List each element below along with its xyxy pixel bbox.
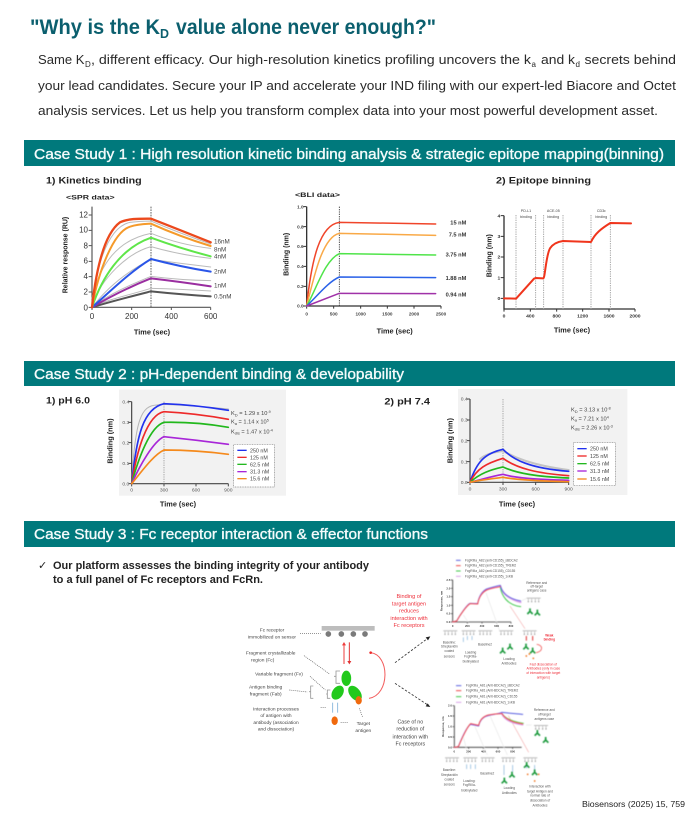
panel: SPR kinetics chart: 400 xyxy=(165,312,179,321)
panel: SPR kinetics chart: 0.5nM xyxy=(214,293,232,300)
panel: epitope binning chart: 1 xyxy=(498,275,501,281)
panel: SPR kinetics chart: 6 xyxy=(84,257,89,266)
panel: pH 7.4 chart: 2) pH 7.4 xyxy=(384,397,430,407)
panel: pH 7.4 chart: 0 xyxy=(469,486,472,492)
chart: FcgRIIIa sensorgram, reduced interaction: 2.5 xyxy=(446,578,451,582)
panel: BLI kinetics chart: 2000 xyxy=(409,311,420,316)
diagram: Fc receptor antibody schematic: interaction with xyxy=(393,734,428,740)
panel: BLI kinetics chart: 0.94 nM xyxy=(446,293,467,299)
chart: FcgRIIIa sensorgram, reduced interaction: sensors xyxy=(444,654,455,658)
callout: binding of target antigen: target antigen xyxy=(392,602,426,608)
diagram: Fc receptor antibody schematic: Variable fragment (Fv) xyxy=(255,671,303,677)
chart: FcgRIIIa sensorgram, no reduction: 2.0 xyxy=(448,704,452,708)
chart: FcgRIIIa sensorgram, no reduction: antigens case xyxy=(534,717,554,721)
diagram: Fc receptor antibody schematic: of antigen with xyxy=(260,713,292,719)
diagram: Fc receptor antibody schematic: Fc receptor xyxy=(260,628,285,634)
panel: pH 6.0 chart: 600 xyxy=(192,488,200,494)
panel: pH 7.4 chart: 250 nM xyxy=(590,447,608,453)
panel: pH 6.0 chart: 15.6 nM xyxy=(250,477,269,483)
intro text block: your lead candidates. Secure your IP and accelerate your IND filing with our expert-led Biacore and Octet xyxy=(38,78,676,93)
chart: FcgRIIIa sensorgram, no reduction: Baseline2 xyxy=(480,772,495,776)
diagram: Fc receptor antibody schematic: immobilized on sensor xyxy=(248,635,296,641)
panel: pH 6.0 chart xyxy=(46,390,286,509)
panel: pH 7.4 chart: a xyxy=(575,418,578,423)
panel: pH 7.4 chart: 0.2 xyxy=(461,438,468,444)
chart: FcgRIIIa sensorgram, reduced interaction: Weak xyxy=(545,633,554,637)
panel: pH 6.0 chart: = 1.14 x 10 xyxy=(237,420,267,426)
panel: pH 6.0 chart: 250 nM xyxy=(250,448,268,454)
panel: epitope binning chart: 800 xyxy=(553,314,561,320)
panel: pH 6.0 chart: 1) pH 6.0 xyxy=(46,396,90,406)
chart: FcgRIIIa sensorgram, no reduction: FcgRIIIa_A81 (Anti-BDCA2)_1xKB xyxy=(466,700,515,704)
panel: epitope binning chart: 2 xyxy=(498,255,501,261)
intro text block: analysis services. Let us help you transform complex data into your most powerful development asset. xyxy=(38,103,658,118)
panel: pH 6.0 chart: 5 xyxy=(267,419,269,423)
panel: pH 6.0 chart: 125 nM xyxy=(250,455,268,461)
panel: pH 6.0 chart: 0.4 xyxy=(122,399,130,405)
panel: SPR kinetics chart: Time (sec) xyxy=(134,328,171,337)
section header: case study 1 xyxy=(24,140,675,166)
intro text block: , different efficacy. Our high-resolution kinetics profiling uncovers the k xyxy=(91,52,531,67)
panel: pH 6.0 chart: dis xyxy=(235,431,240,436)
panel: BLI kinetics chart: 3.75 nM xyxy=(446,253,467,259)
callout: platform statement: to a full panel of Fc receptors and FcRn. xyxy=(53,574,263,586)
panel: epitope binning chart: PD-L1 xyxy=(521,209,531,213)
panel: pH 7.4 chart: Time (sec) xyxy=(499,500,536,509)
diagram: Fc receptor antibody schematic: antigen xyxy=(355,728,372,734)
chart: FcgRIIIa sensorgram, no reduction: Interaction with xyxy=(529,784,551,788)
callout: binding of target antigen xyxy=(390,594,428,629)
chart: FcgRIIIa sensorgram, reduced interaction: FcgRIIIa_A82 (anti-CD155)_CD155 xyxy=(465,569,516,573)
panel: SPR kinetics chart: 4nM xyxy=(214,253,226,260)
panel: BLI kinetics chart: 1.0 xyxy=(297,204,304,209)
panel: SPR kinetics chart xyxy=(46,175,232,337)
diagram: Fc receptor antibody schematic: antibody (association xyxy=(253,720,299,726)
panel: BLI kinetics chart: 1000 xyxy=(355,311,366,316)
section header: case study 3: Case Study 3 : Fc receptor interaction & effector functions xyxy=(34,526,428,543)
panel: SPR kinetics chart: 1) Kinetics binding xyxy=(46,175,142,185)
chart: FcgRIIIa sensorgram, reduced interaction: Loading xyxy=(503,657,515,661)
chart: FcgRIIIa sensorgram, no reduction: FcgRIIIa_A81 (Anti-BDCA2)_sBDCA2 xyxy=(466,684,520,688)
panel: SPR kinetics chart: 0 xyxy=(84,303,89,312)
panel: pH 6.0 chart: 0.0 xyxy=(122,481,130,487)
panel: pH 7.4 chart: K xyxy=(571,425,575,431)
panel: BLI kinetics chart: Binding (nm) xyxy=(283,233,290,276)
chart: FcgRIIIa sensorgram, reduced interaction xyxy=(439,558,560,679)
panel: pH 6.0 chart: 300 xyxy=(160,488,168,494)
panel: pH 7.4 chart: 0.1 xyxy=(461,459,468,465)
chart: FcgRIIIa sensorgram, reduced interaction: 0.5 xyxy=(446,612,451,616)
panel: pH 6.0 chart: = 1.29 x 10 xyxy=(238,411,267,417)
title xyxy=(30,16,436,41)
diagram: Fc receptor antibody schematic: Fc receptors xyxy=(396,742,425,748)
panel: BLI kinetics chart: 0.6 xyxy=(297,244,304,249)
chart: FcgRIIIa sensorgram, reduced interaction: Streptavidin xyxy=(441,645,458,649)
chart: FcgRIIIa sensorgram, no reduction: FcgRIIIa- xyxy=(463,783,476,787)
intro text block xyxy=(38,52,676,118)
panel: pH 6.0 chart: K xyxy=(231,420,235,426)
panel: pH 6.0 chart: = 1.47 x 10 xyxy=(240,429,270,435)
panel: pH 6.0 chart: -4 xyxy=(270,428,273,432)
panel: pH 7.4 chart: 600 xyxy=(532,486,540,492)
panel: pH 6.0 chart: -9 xyxy=(267,410,271,414)
chart: FcgRIIIa sensorgram, reduced interaction: 200 xyxy=(465,624,470,628)
panel: SPR kinetics chart: 600 xyxy=(204,312,218,321)
chart: FcgRIIIa sensorgram, reduced interaction: 0 xyxy=(452,624,454,628)
chart: FcgRIIIa sensorgram, no reduction: dissociation of xyxy=(530,798,550,802)
title: value alone never enough?" xyxy=(176,16,436,39)
panel: epitope binning chart: Time (sec) xyxy=(554,326,591,335)
panel: pH 7.4 chart: -8 xyxy=(607,407,611,411)
panel: epitope binning chart xyxy=(487,176,641,335)
panel: SPR kinetics chart: 16nM xyxy=(214,239,230,246)
panel: pH 6.0 chart: K xyxy=(231,429,235,435)
chart: FcgRIIIa sensorgram, reduced interaction: FcgRIIIa_A82 (anti-CD155)_TREM2 xyxy=(465,564,516,568)
chart: FcgRIIIa sensorgram, reduced interaction: binding xyxy=(544,638,555,642)
chart: FcgRIIIa sensorgram, reduced interaction: FcgRIIIa_A82 (anti-CD155)_sBDCA2 xyxy=(465,558,518,562)
panel: epitope binning chart: 0 xyxy=(498,296,501,302)
callout: binding of target antigen: Binding of xyxy=(397,594,422,600)
panel: pH 7.4 chart: = 2.26 x 10 xyxy=(580,425,610,431)
diagram: Fc receptor antibody schematic: Interaction processes xyxy=(253,706,300,712)
chart: FcgRIIIa sensorgram, reduced interaction: biotinylated xyxy=(463,660,479,664)
chart: FcgRIIIa sensorgram, reduced interaction: 2.0 xyxy=(446,586,451,590)
chart: FcgRIIIa sensorgram, reduced interaction: FcgRIIIa- xyxy=(464,655,477,659)
intro text block: Same K xyxy=(38,52,85,67)
panel: epitope binning chart: 3 xyxy=(498,234,501,240)
chart: FcgRIIIa sensorgram, reduced interaction: Loading xyxy=(465,650,477,654)
section header: case study 1: Case Study 1 : High resolution kinetic binding analysis & strategic epitope mapping(binning) xyxy=(34,146,664,163)
panel: SPR kinetics chart: 0 xyxy=(90,312,95,321)
callout: binding of target antigen: Fc receptors xyxy=(393,623,425,629)
title: "Why is the K xyxy=(30,16,160,39)
panel: epitope binning chart: 2) Epitope binning xyxy=(496,176,591,186)
panel: pH 6.0 chart: D xyxy=(235,412,238,417)
panel: pH 7.4 chart: 900 xyxy=(565,486,573,492)
chart: FcgRIIIa sensorgram, reduced interaction: 1.0 xyxy=(446,603,451,607)
chart: FcgRIIIa sensorgram, reduced interaction: antigens) xyxy=(537,675,550,679)
callout: binding of target antigen: reduces xyxy=(399,608,419,614)
panel: pH 6.0 chart: 0.3 xyxy=(122,420,130,426)
panel: pH 7.4 chart: -3 xyxy=(610,424,613,428)
panel: pH 7.4 chart: 125 nM xyxy=(590,454,608,460)
callout: platform statement: ✓ xyxy=(38,560,47,572)
panel: BLI kinetics chart: 15 nM xyxy=(450,221,467,227)
chart: FcgRIIIa sensorgram, no reduction: 0 xyxy=(454,749,456,753)
panel: pH 6.0 chart: Time (sec) xyxy=(160,500,197,509)
chart: FcgRIIIa sensorgram, reduced interaction: Fast dissociation of xyxy=(530,662,557,666)
chart: FcgRIIIa sensorgram, no reduction: FcgRIIIa_A81 (Anti-BDCA2)_CD155 xyxy=(466,695,518,699)
chart: FcgRIIIa sensorgram, reduced interaction: Antibodies (only in case xyxy=(526,666,560,670)
panel: epitope binning chart: 0 xyxy=(503,314,506,320)
chart: FcgRIIIa sensorgram, reduced interaction: Baseline: xyxy=(443,640,456,644)
panel: pH 6.0 chart: 900 xyxy=(224,488,233,494)
chart: FcgRIIIa sensorgram, no reduction: Loading xyxy=(504,786,515,790)
panel: pH 7.4 chart: K xyxy=(571,416,575,422)
title: D xyxy=(160,26,169,41)
panel: epitope binning chart: 1200 xyxy=(577,314,588,320)
panel: epitope binning chart: CD3ε xyxy=(597,209,606,213)
panel: SPR kinetics chart: 4 xyxy=(84,272,89,281)
chart: FcgRIIIa sensorgram, no reduction: 600 xyxy=(496,749,501,753)
chart: FcgRIIIa sensorgram, reduced interaction: FcgRIIIa_A82 (anti-CD155)_1xKB xyxy=(465,574,513,578)
chart: FcgRIIIa sensorgram, no reduction: Loading: xyxy=(463,779,476,783)
panel: BLI kinetics chart: 0 xyxy=(305,311,308,316)
chart: FcgRIIIa sensorgram, reduced interaction: Response, nm xyxy=(439,590,443,611)
panel: SPR kinetics chart: 2 xyxy=(84,288,89,297)
panel: epitope binning chart: binding xyxy=(520,215,532,219)
panel: epitope binning chart: binding xyxy=(547,215,559,219)
panel: SPR kinetics chart: 2nM xyxy=(214,268,226,275)
chart: FcgRIIIa sensorgram, no reduction: normal rate of xyxy=(530,794,550,798)
chart: FcgRIIIa sensorgram, no reduction: off-target xyxy=(538,712,551,716)
diagram: Fc receptor antibody schematic: Target xyxy=(357,721,371,727)
panel: pH 7.4 chart: = 3.13 x 10 xyxy=(578,408,607,414)
panel: pH 6.0 chart: 0 xyxy=(130,488,133,494)
chart: FcgRIIIa sensorgram, reduced interaction: antigens case xyxy=(527,589,547,593)
chart: FcgRIIIa sensorgram, no reduction: sensors xyxy=(444,782,455,786)
panel: epitope binning chart: 400 xyxy=(526,314,535,320)
panel: pH 7.4 chart xyxy=(384,389,627,509)
panel: pH 7.4 chart: 62.5 nM xyxy=(590,462,609,468)
panel: BLI kinetics chart: 7.5 nM xyxy=(449,233,467,239)
panel: BLI kinetics chart: 2500 xyxy=(436,311,447,316)
chart: FcgRIIIa sensorgram, no reduction: Reference and xyxy=(534,708,555,712)
panel: BLI kinetics chart: 500 xyxy=(330,311,338,316)
panel: pH 7.4 chart: Binding (nm) xyxy=(445,418,454,463)
chart: FcgRIIIa sensorgram, no reduction: 0.0 xyxy=(448,745,452,749)
intro text block: and k xyxy=(541,52,575,67)
chart: FcgRIIIa sensorgram, no reduction: 1.5 xyxy=(448,714,452,718)
panel: SPR kinetics chart: <SPR data> xyxy=(66,194,115,201)
diagram: Fc receptor antibody schematic xyxy=(246,626,430,748)
chart: FcgRIIIa sensorgram, no reduction: 200 xyxy=(466,749,471,753)
panel: BLI kinetics chart: <BLI data> xyxy=(295,192,340,199)
panel: pH 6.0 chart: 62.5 nM xyxy=(250,462,269,468)
panel: epitope binning chart: 2000 xyxy=(629,314,641,320)
panel: SPR kinetics chart: 1nM xyxy=(214,282,226,289)
panel: pH 6.0 chart: K xyxy=(231,411,235,417)
panel: epitope binning chart: Binding (nm) xyxy=(487,234,494,277)
chart: FcgRIIIa sensorgram, reduced interaction: of interaction with target xyxy=(526,671,560,675)
diagram: Fc receptor antibody schematic: region (Fc) xyxy=(251,658,275,664)
panel: SPR kinetics chart: 8 xyxy=(84,241,89,250)
callout: platform statement xyxy=(38,560,370,586)
chart: FcgRIIIa sensorgram, no reduction: Response, nm xyxy=(441,716,445,737)
panel: pH 7.4 chart: dis xyxy=(575,427,580,432)
chart: FcgRIIIa sensorgram, reduced interaction: Antibodies xyxy=(502,662,517,666)
panel: pH 7.4 chart: 31.3 nM xyxy=(590,469,609,475)
panel: pH 7.4 chart: 0.4 xyxy=(461,397,468,403)
chart: FcgRIIIa sensorgram, no reduction: Antibodies xyxy=(533,803,548,807)
diagram: Fc receptor antibody schematic: Antigen binding xyxy=(249,685,283,691)
panel: pH 7.4 chart: 4 xyxy=(607,415,609,419)
chart: FcgRIIIa sensorgram, reduced interaction: 400 xyxy=(480,624,485,628)
panel: pH 6.0 chart: Binding (nm) xyxy=(105,418,114,464)
chart: FcgRIIIa sensorgram, no reduction: Antibodies xyxy=(502,791,517,795)
diagram: Fc receptor antibody schematic: and dissociation) xyxy=(258,727,295,733)
chart: FcgRIIIa sensorgram, no reduction: 1.0 xyxy=(448,725,452,729)
citation: Biosensors (2025) 15, 759 xyxy=(582,799,685,809)
chart: FcgRIIIa sensorgram, no reduction: Baseline: xyxy=(443,768,456,772)
section header: case study 3 xyxy=(24,521,675,547)
panel: SPR kinetics chart: 10 xyxy=(79,226,89,235)
chart: FcgRIIIa sensorgram, no reduction xyxy=(441,684,555,807)
chart: FcgRIIIa sensorgram, no reduction: FcgRIIIa_A81 (Anti-BDCA2)_TREM2 xyxy=(466,689,518,693)
panel: epitope binning chart: 1600 xyxy=(603,314,615,320)
panel: SPR kinetics chart: 12 xyxy=(79,211,89,220)
panel: pH 7.4 chart: 0.3 xyxy=(461,418,468,424)
chart: FcgRIIIa sensorgram, reduced interaction: Baseline2 xyxy=(478,642,492,646)
intro text block: a xyxy=(532,60,536,69)
chart: FcgRIIIa sensorgram, reduced interaction: Reference and xyxy=(526,581,547,585)
chart: FcgRIIIa sensorgram, reduced interaction: 800 xyxy=(509,624,514,628)
chart: FcgRIIIa sensorgram, no reduction: 800 xyxy=(510,749,515,753)
chart: FcgRIIIa sensorgram, no reduction: coated xyxy=(445,778,454,782)
chart: FcgRIIIa sensorgram, reduced interaction: 0.0 xyxy=(446,620,451,624)
panel: BLI kinetics chart: Time (sec) xyxy=(377,326,413,335)
intro text block: d xyxy=(576,60,580,69)
chart: FcgRIIIa sensorgram, no reduction: biotinylated xyxy=(461,788,478,792)
panel: pH 7.4 chart: D xyxy=(575,409,578,414)
chart: FcgRIIIa sensorgram, no reduction: 400 xyxy=(481,749,486,753)
panel: epitope binning chart: 4 xyxy=(498,213,501,219)
panel: SPR kinetics chart: 8nM xyxy=(214,246,226,253)
panel: epitope binning chart: binding xyxy=(595,215,607,219)
chart: FcgRIIIa sensorgram, no reduction: 0.5 xyxy=(448,735,452,739)
chart: FcgRIIIa sensorgram, reduced interaction: coated xyxy=(445,649,454,653)
callout: platform statement: Our platform assesses the binding integrity of your antibody xyxy=(53,560,370,572)
callout: binding of target antigen: interaction with xyxy=(390,616,428,622)
diagram: Fc receptor antibody schematic: fragment (Fab) xyxy=(250,692,282,698)
panel: pH 6.0 chart: 31.3 nM xyxy=(250,470,269,476)
chart: FcgRIIIa sensorgram, no reduction: target Antigen and xyxy=(527,789,553,793)
chart: FcgRIIIa sensorgram, no reduction: Streptavidin xyxy=(441,773,458,777)
panel: BLI kinetics chart: 0.8 xyxy=(297,224,304,229)
panel: BLI kinetics chart xyxy=(283,192,467,335)
panel: pH 7.4 chart: 300 xyxy=(499,486,507,492)
chart: FcgRIIIa sensorgram, reduced interaction: off-target xyxy=(530,585,543,589)
panel: BLI kinetics chart: 1.88 nM xyxy=(446,276,467,282)
panel: epitope binning chart: ACE-05 xyxy=(547,209,560,213)
panel: pH 7.4 chart: K xyxy=(571,408,575,414)
panel: BLI kinetics chart: 1500 xyxy=(382,311,393,316)
panel: pH 6.0 chart: a xyxy=(235,421,238,426)
diagram: Fc receptor antibody schematic: reduction of xyxy=(396,727,425,733)
panel: pH 7.4 chart: 0.0 xyxy=(461,480,468,486)
section header: case study 2 xyxy=(24,361,675,386)
intro text block: D xyxy=(85,60,91,69)
chart: FcgRIIIa sensorgram, reduced interaction: 600 xyxy=(494,624,499,628)
section header: case study 2: Case Study 2 : pH-dependent binding & developability xyxy=(34,366,404,383)
chart: FcgRIIIa sensorgram, reduced interaction: 1.5 xyxy=(446,595,451,599)
panel: pH 6.0 chart: 0.1 xyxy=(122,461,130,467)
diagram: Fc receptor antibody schematic: Case of no xyxy=(397,719,423,725)
panel: BLI kinetics chart: 0.4 xyxy=(297,264,304,269)
panel: pH 7.4 chart: = 7.21 x 10 xyxy=(577,416,607,422)
panel: BLI kinetics chart: 0.2 xyxy=(297,284,304,289)
panel: SPR kinetics chart: 200 xyxy=(125,312,139,321)
intro text block: secrets behind xyxy=(584,52,676,67)
diagram: Fc receptor antibody schematic: Fragment crystallizable xyxy=(246,651,296,657)
panel: pH 7.4 chart: 15.6 nM xyxy=(590,477,609,483)
panel: pH 6.0 chart: 0.2 xyxy=(122,440,130,446)
panel: SPR kinetics chart: Relative response (RU) xyxy=(62,217,69,293)
panel: BLI kinetics chart: 0.0 xyxy=(297,304,304,309)
